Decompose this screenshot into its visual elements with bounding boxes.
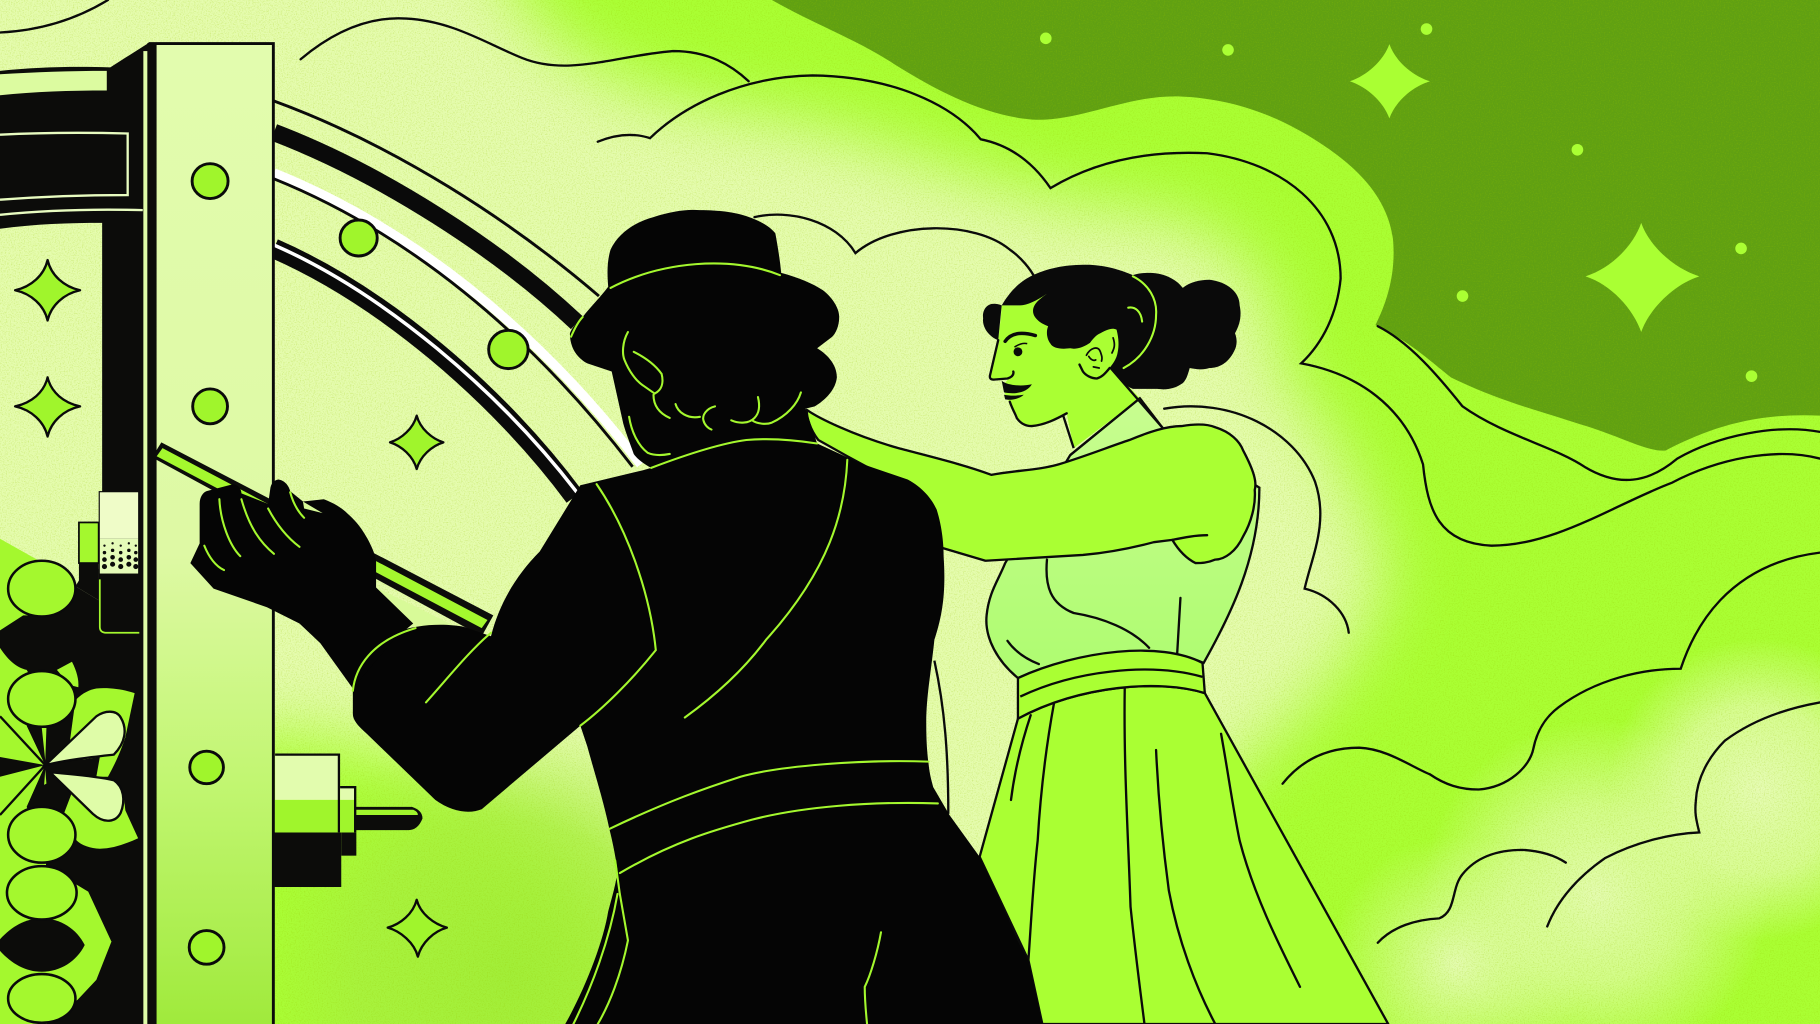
hair: [983, 265, 1241, 389]
plate rivets: [189, 164, 228, 964]
back line behind skirt: [934, 661, 948, 814]
sky stars and dots: [1040, 23, 1757, 382]
bodice folds: [1008, 560, 1180, 664]
hand finger lines: [204, 492, 304, 570]
decorative flower column: [0, 539, 143, 1024]
hand: [190, 479, 413, 688]
door latch: [75, 491, 139, 635]
door stars: [15, 260, 447, 957]
arm: [807, 410, 1255, 563]
neck and face: [990, 294, 1140, 448]
ear: [1090, 328, 1118, 368]
coat and head body: [353, 210, 1042, 1024]
skirt: [980, 686, 1388, 1024]
skirt folds: [1011, 688, 1300, 1024]
door plate: [147, 43, 273, 1024]
vault arcs: [274, 101, 641, 497]
coat seam lines: [353, 263, 938, 1024]
bodice: [986, 398, 1259, 678]
belt: [1018, 651, 1205, 719]
hinge bolt: [274, 755, 422, 887]
dark green night sky: [772, 0, 1820, 451]
woman: [807, 265, 1388, 1024]
facial features: [1002, 333, 1035, 400]
man silhouette: [152, 210, 1042, 1024]
arc rivets: [340, 220, 528, 369]
vault frame left side: [0, 43, 149, 1024]
hair highlights: [1124, 276, 1156, 368]
stick: [152, 442, 493, 636]
